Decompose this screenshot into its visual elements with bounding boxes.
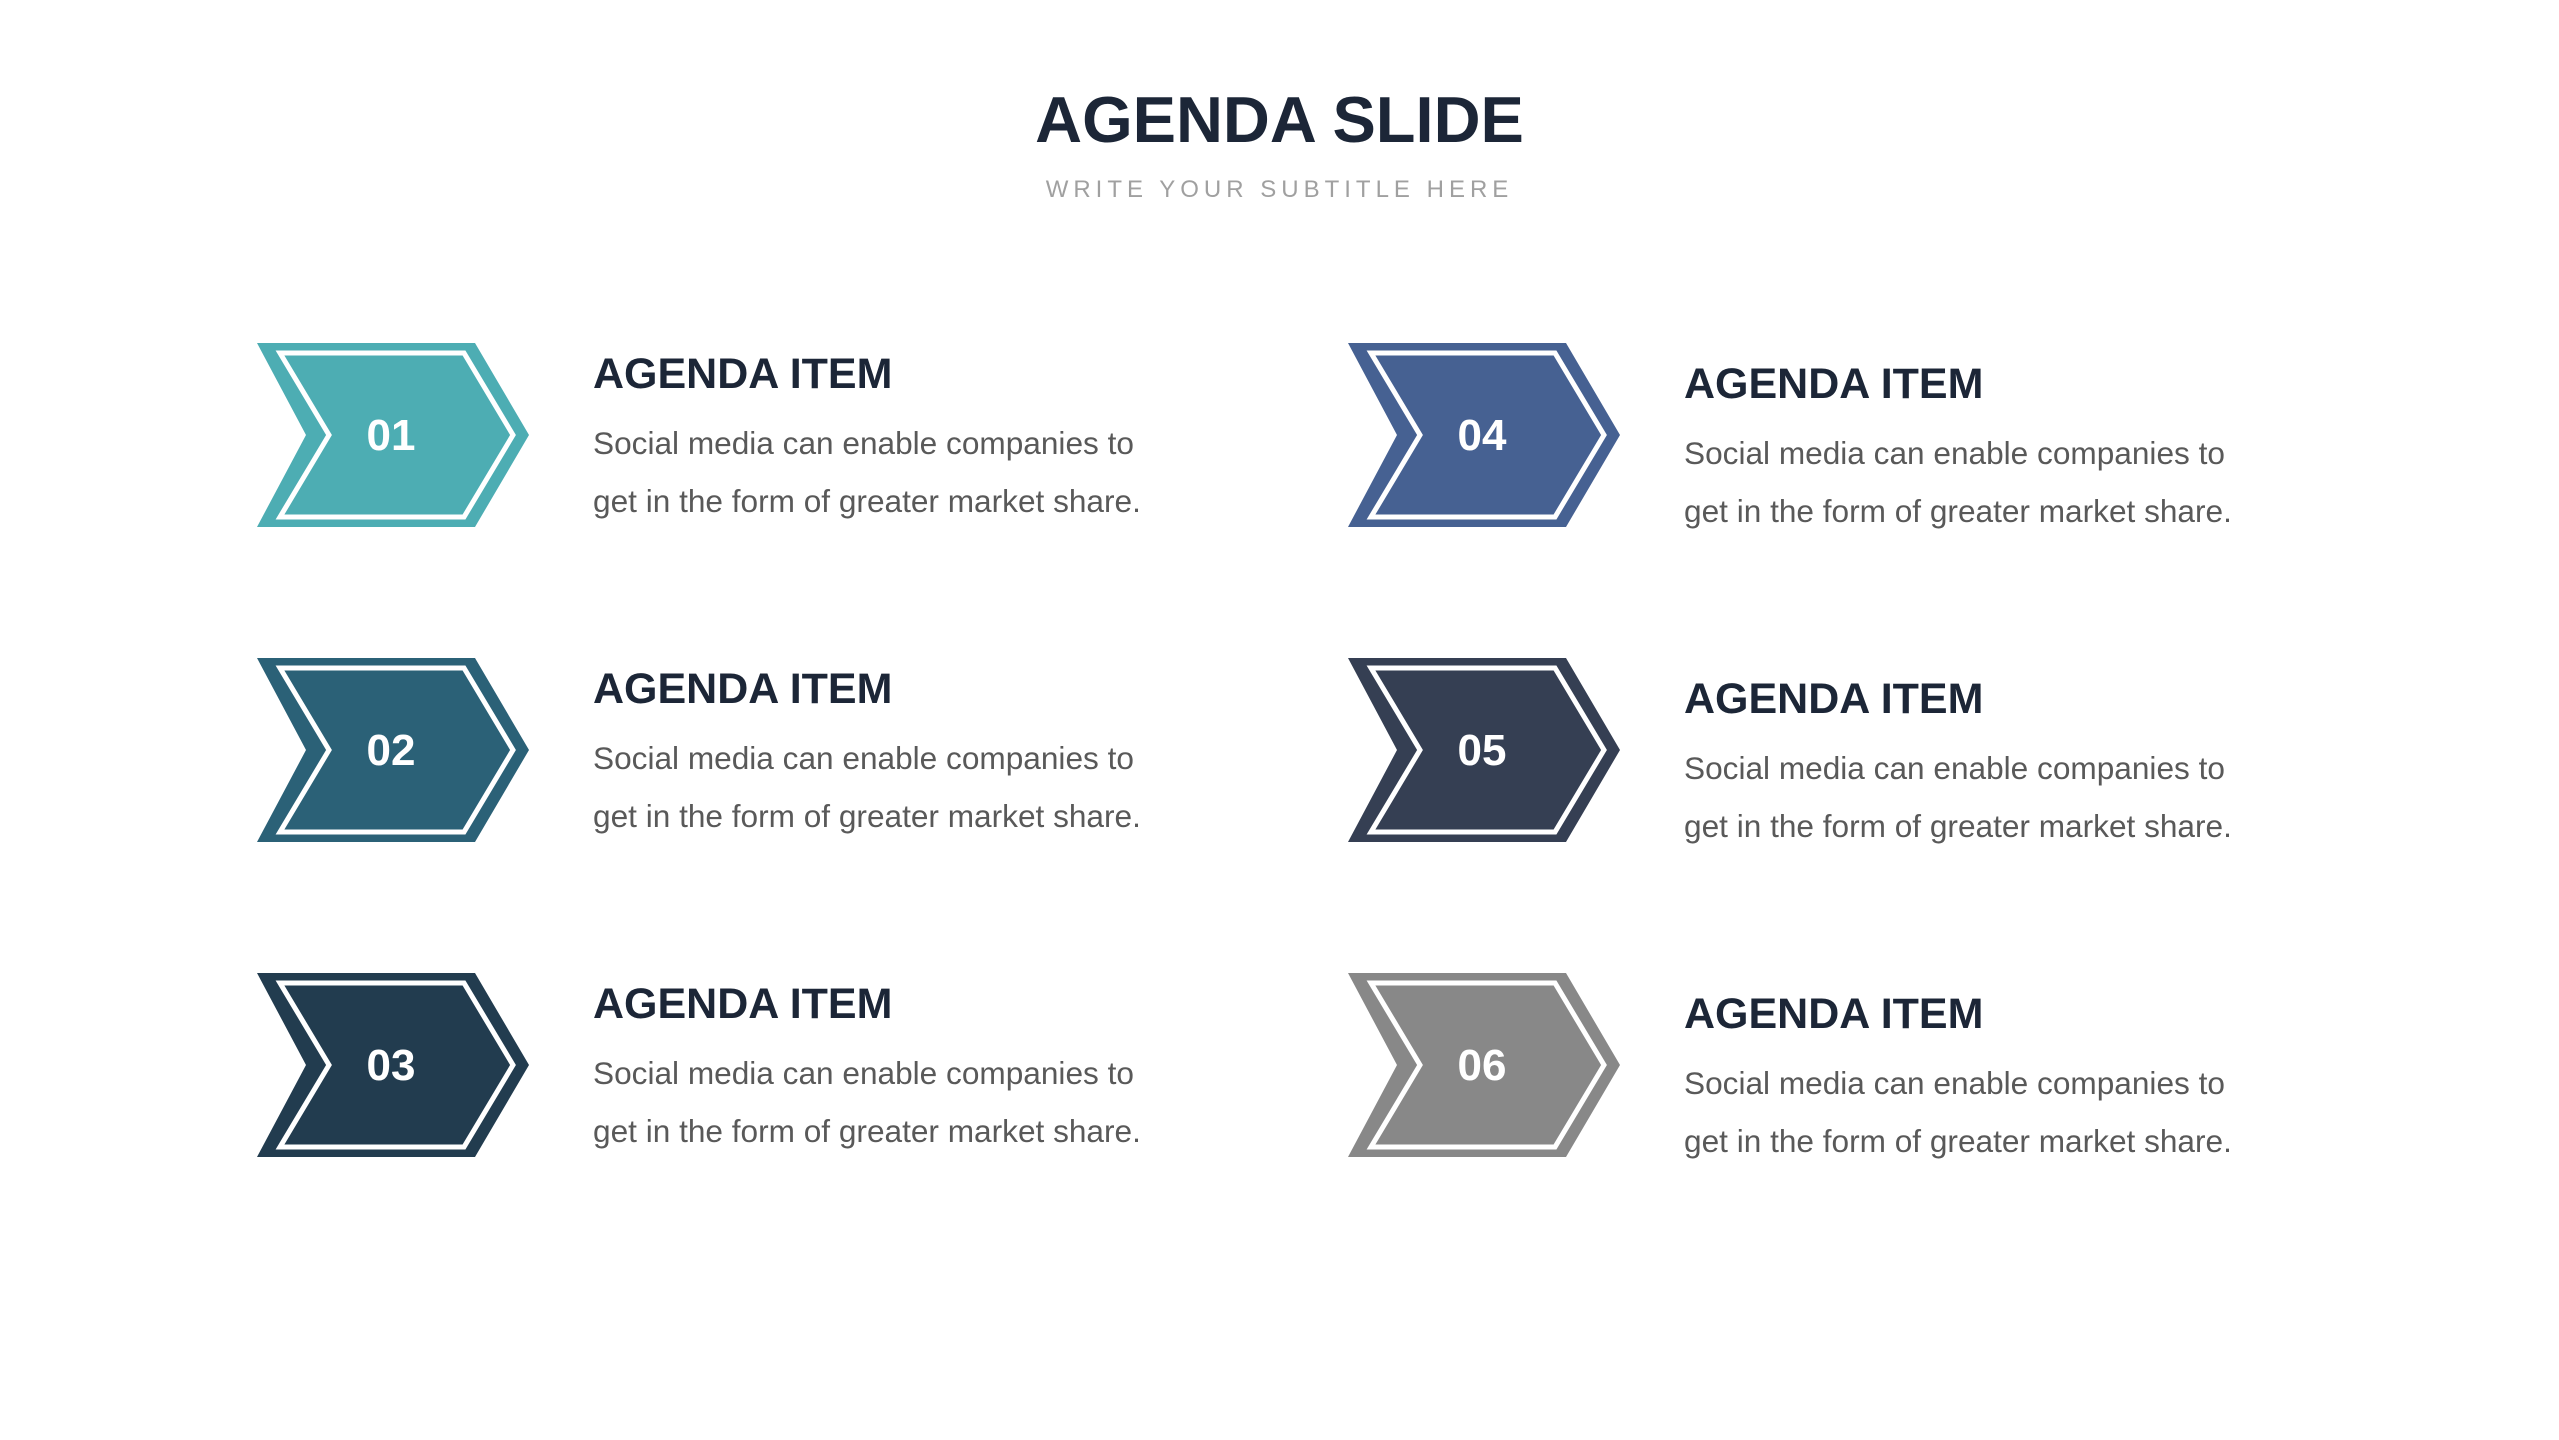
icon: chevron 01: 01: [367, 411, 415, 460]
icon: chevron 02: [257, 658, 529, 842]
item 03 text: Social media can enable companies to: [593, 1055, 1134, 1091]
item 01 text: Social media can enable companies to: [593, 425, 1134, 461]
item 02 text: get in the form of greater market share.: [593, 798, 1141, 834]
icon: chevron 02: 02: [367, 726, 415, 775]
item 05 text: Social media can enable companies to: [1684, 750, 2225, 786]
item 03 text: get in the form of greater market share.: [593, 1113, 1141, 1149]
icon: chevron 03: [257, 973, 529, 1157]
item 06 text: [1684, 990, 2232, 1159]
item 01 text: AGENDA ITEM: [593, 350, 892, 398]
icon: chevron 04: 04: [1458, 411, 1507, 460]
item 05 text: [1684, 675, 2232, 844]
icon: chevron 04: [1348, 343, 1620, 527]
item 06 text: get in the form of greater market share.: [1684, 1123, 2232, 1159]
item 05 text: AGENDA ITEM: [1684, 675, 1983, 723]
item 03 text: [593, 980, 1141, 1149]
icon: chevron 01: [257, 343, 529, 527]
icon: chevron 05: [1348, 658, 1620, 842]
icon: chevron 06: [1348, 973, 1620, 1157]
item 01 text: [593, 350, 1141, 519]
icon: chevron 05: 05: [1458, 726, 1506, 775]
item 04 text: get in the form of greater market share.: [1684, 493, 2232, 529]
subtitle: WRITE YOUR SUBTITLE HERE: [1046, 176, 1513, 203]
item 02 text: AGENDA ITEM: [593, 665, 892, 713]
item 02 text: Social media can enable companies to: [593, 740, 1134, 776]
item 01 text: get in the form of greater market share.: [593, 483, 1141, 519]
item 06 text: Social media can enable companies to: [1684, 1065, 2225, 1101]
title: AGENDA SLIDE: [1035, 83, 1524, 156]
item 02 text: [593, 665, 1141, 834]
item 04 text: [1684, 360, 2232, 529]
icon: chevron 03: 03: [367, 1041, 415, 1090]
item 04 text: Social media can enable companies to: [1684, 435, 2225, 471]
item 03 text: AGENDA ITEM: [593, 980, 892, 1028]
item 05 text: get in the form of greater market share.: [1684, 808, 2232, 844]
item 06 text: AGENDA ITEM: [1684, 990, 1983, 1038]
icon: chevron 06: 06: [1458, 1041, 1506, 1090]
item 04 text: AGENDA ITEM: [1684, 360, 1983, 408]
